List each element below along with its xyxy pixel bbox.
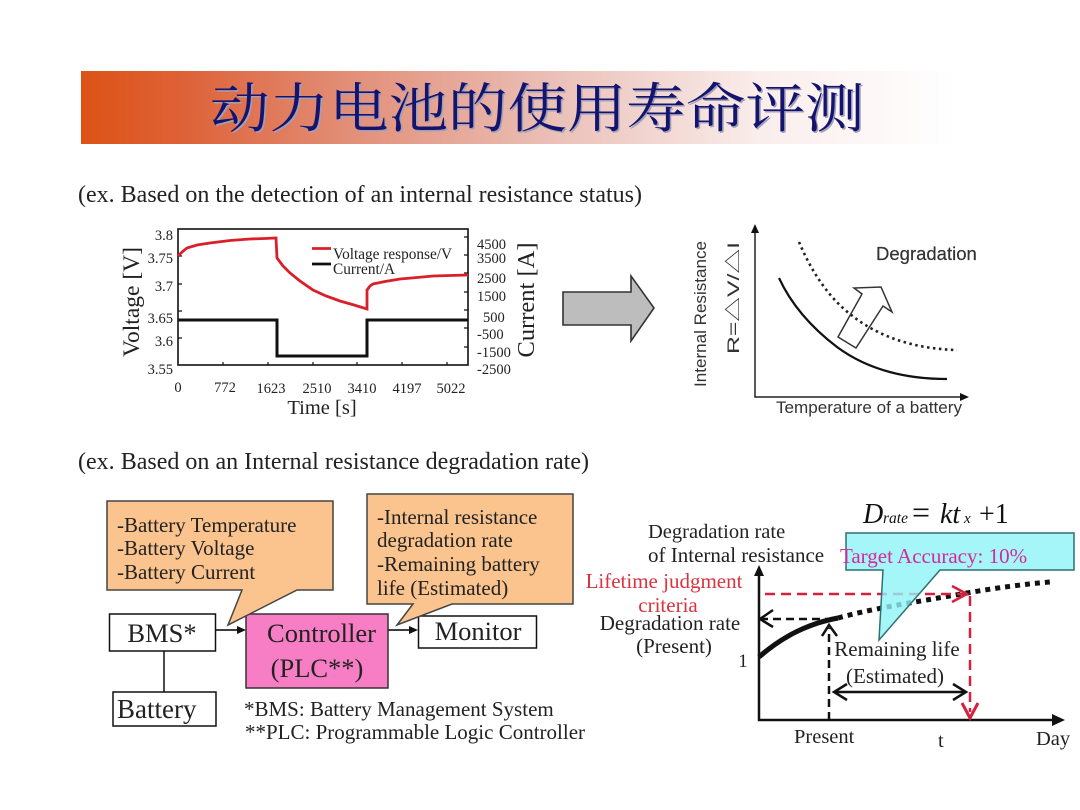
- footnotes: **PLC: Programmable Logic Controller: [245, 720, 585, 744]
- callout: battery inputs: -Battery Current: [117, 560, 255, 584]
- left axis labels: 3.8: [155, 228, 173, 244]
- right axis labels: 1500: [477, 289, 506, 305]
- line chart: voltage and current over time: [119, 228, 540, 419]
- callout: controller outputs: life (Estimated): [377, 576, 508, 600]
- degraded battery curve: [799, 242, 957, 350]
- label: remaining life: [834, 637, 960, 688]
- left axis labels: 3.6: [155, 334, 173, 350]
- label: remaining life: Remaining life: [834, 637, 960, 661]
- formula: kt: [940, 499, 961, 530]
- chart: internal resistance vs temperature: [691, 224, 977, 417]
- chart frame and ticks: [178, 229, 468, 365]
- label: lifetime judgment criteria: criteria: [638, 593, 698, 617]
- left axis labels: 3.75: [148, 251, 173, 267]
- label: lifetime judgment criteria: Lifetime judgment: [586, 569, 743, 593]
- y axis title: [648, 521, 824, 567]
- formula: D: [862, 499, 883, 530]
- box: controller: Controller: [267, 618, 376, 648]
- formula: rate: [883, 510, 908, 527]
- current curve: [178, 320, 468, 356]
- predicted dotted curve: [838, 582, 1050, 618]
- red dashed criteria line: [765, 586, 978, 718]
- x axis labels: t: [938, 730, 944, 752]
- x axis label: Temperature of a battery: [776, 398, 962, 417]
- formula: x: [963, 511, 971, 527]
- axes: [755, 229, 964, 397]
- x axis labels: [794, 726, 1071, 752]
- y axis labels: Internal Resistance: [691, 241, 710, 387]
- callout: battery inputs: -Battery Voltage: [117, 536, 254, 560]
- left axis labels: 3.65: [148, 311, 173, 327]
- x axis labels: [174, 380, 466, 397]
- heading: internal resistance status: (ex. Based on the detection of an internal resistance status): [78, 182, 642, 208]
- legend: Voltage response/V: [333, 246, 452, 263]
- box: controller: [246, 614, 388, 688]
- x axis labels: 3410: [348, 381, 376, 397]
- right axis labels: [477, 237, 511, 378]
- x axis labels: Present: [794, 726, 855, 748]
- right axis labels: -500: [477, 327, 504, 343]
- box: monitor: [418, 616, 536, 648]
- label: degradation rate present: Degradation rate: [600, 611, 740, 635]
- line chart: voltage and current over time: Current [A]: [513, 243, 540, 357]
- x axis labels: Day: [1036, 728, 1071, 750]
- arrow: controller to monitor: [388, 626, 418, 634]
- box: monitor: Monitor: [435, 616, 522, 646]
- x axis labels: 4197: [392, 381, 422, 397]
- x axis labels: 1623: [256, 381, 286, 397]
- axis titles: Time [s]: [287, 397, 357, 419]
- right axis labels: -1500: [477, 345, 511, 361]
- label: one: 1: [738, 651, 748, 672]
- left axis labels: 3.55: [148, 362, 173, 378]
- box: controller: (PLC**): [271, 653, 363, 683]
- x axis labels: 772: [214, 380, 236, 396]
- y axis title: Degradation rate: [648, 521, 785, 543]
- arrow: grey block arrow: [563, 276, 654, 341]
- y axis title: of Internal resistance: [648, 543, 824, 567]
- callout: controller outputs: -Remaining battery: [377, 552, 540, 576]
- right axis labels: 3500: [477, 251, 506, 267]
- right axis labels: 4500: [477, 237, 506, 253]
- right axis labels: 500: [483, 310, 505, 326]
- box: BMS: [110, 614, 216, 651]
- arrow: BMS to controller: [216, 626, 246, 634]
- chart: internal resistance vs temperature: R=△V/△I: [724, 242, 743, 354]
- label: remaining life: (Estimated): [846, 664, 944, 688]
- box: battery: [113, 692, 216, 726]
- label: Degradation: Degradation: [876, 243, 977, 264]
- footnotes: [244, 697, 585, 744]
- hollow degradation arrow: [838, 287, 892, 348]
- fresh battery curve: [779, 278, 947, 379]
- left axis labels: 3.7: [155, 279, 173, 295]
- callout: target accuracy: Target Accuracy: 10%: [840, 544, 1027, 568]
- x axis labels: 2510: [302, 381, 332, 397]
- box: BMS: BMS*: [127, 618, 197, 648]
- black dashed present lines: [760, 610, 966, 720]
- legend: Current/A: [333, 261, 395, 278]
- block diagram: [107, 494, 585, 744]
- voltage response curve: [178, 238, 468, 309]
- heading: degradation rate: (ex. Based on an Internal resistance degradation rate): [78, 449, 589, 475]
- formula: =: [912, 494, 930, 530]
- callout: battery inputs: [107, 501, 333, 625]
- line chart: voltage and current over time: Voltage [V]: [119, 247, 145, 357]
- x axis labels: 5022: [436, 381, 466, 397]
- callout: target accuracy: [840, 533, 1074, 640]
- x axis labels: 0: [174, 380, 182, 396]
- right axis labels: -2500: [477, 362, 511, 378]
- label: lifetime judgment criteria: [586, 569, 743, 617]
- connector: BMS to battery: [163, 651, 165, 692]
- formula: [862, 494, 1009, 530]
- label: degradation rate present: (Present): [636, 634, 712, 658]
- label: degradation rate present: [600, 611, 740, 658]
- left axis labels: [148, 228, 173, 378]
- right axis labels: 2500: [477, 271, 506, 287]
- formula: +1: [979, 499, 1009, 530]
- callout: controller outputs: -Internal resistance: [377, 505, 537, 529]
- callout: battery inputs: -Battery Temperature: [117, 513, 296, 537]
- legend: [312, 246, 452, 278]
- callout: controller outputs: [367, 494, 573, 625]
- footnotes: *BMS: Battery Management System: [244, 697, 554, 721]
- axes: [754, 565, 1065, 726]
- box: battery: Battery: [117, 694, 197, 724]
- measured curve: [759, 618, 838, 657]
- callout: controller outputs: degradation rate: [377, 528, 513, 552]
- title banner: 动力电池的使用寿命评测: [212, 68, 866, 144]
- title banner: 动力电池的使用寿命评测: [210, 66, 864, 143]
- chart: degradation rate over days: [586, 494, 1074, 752]
